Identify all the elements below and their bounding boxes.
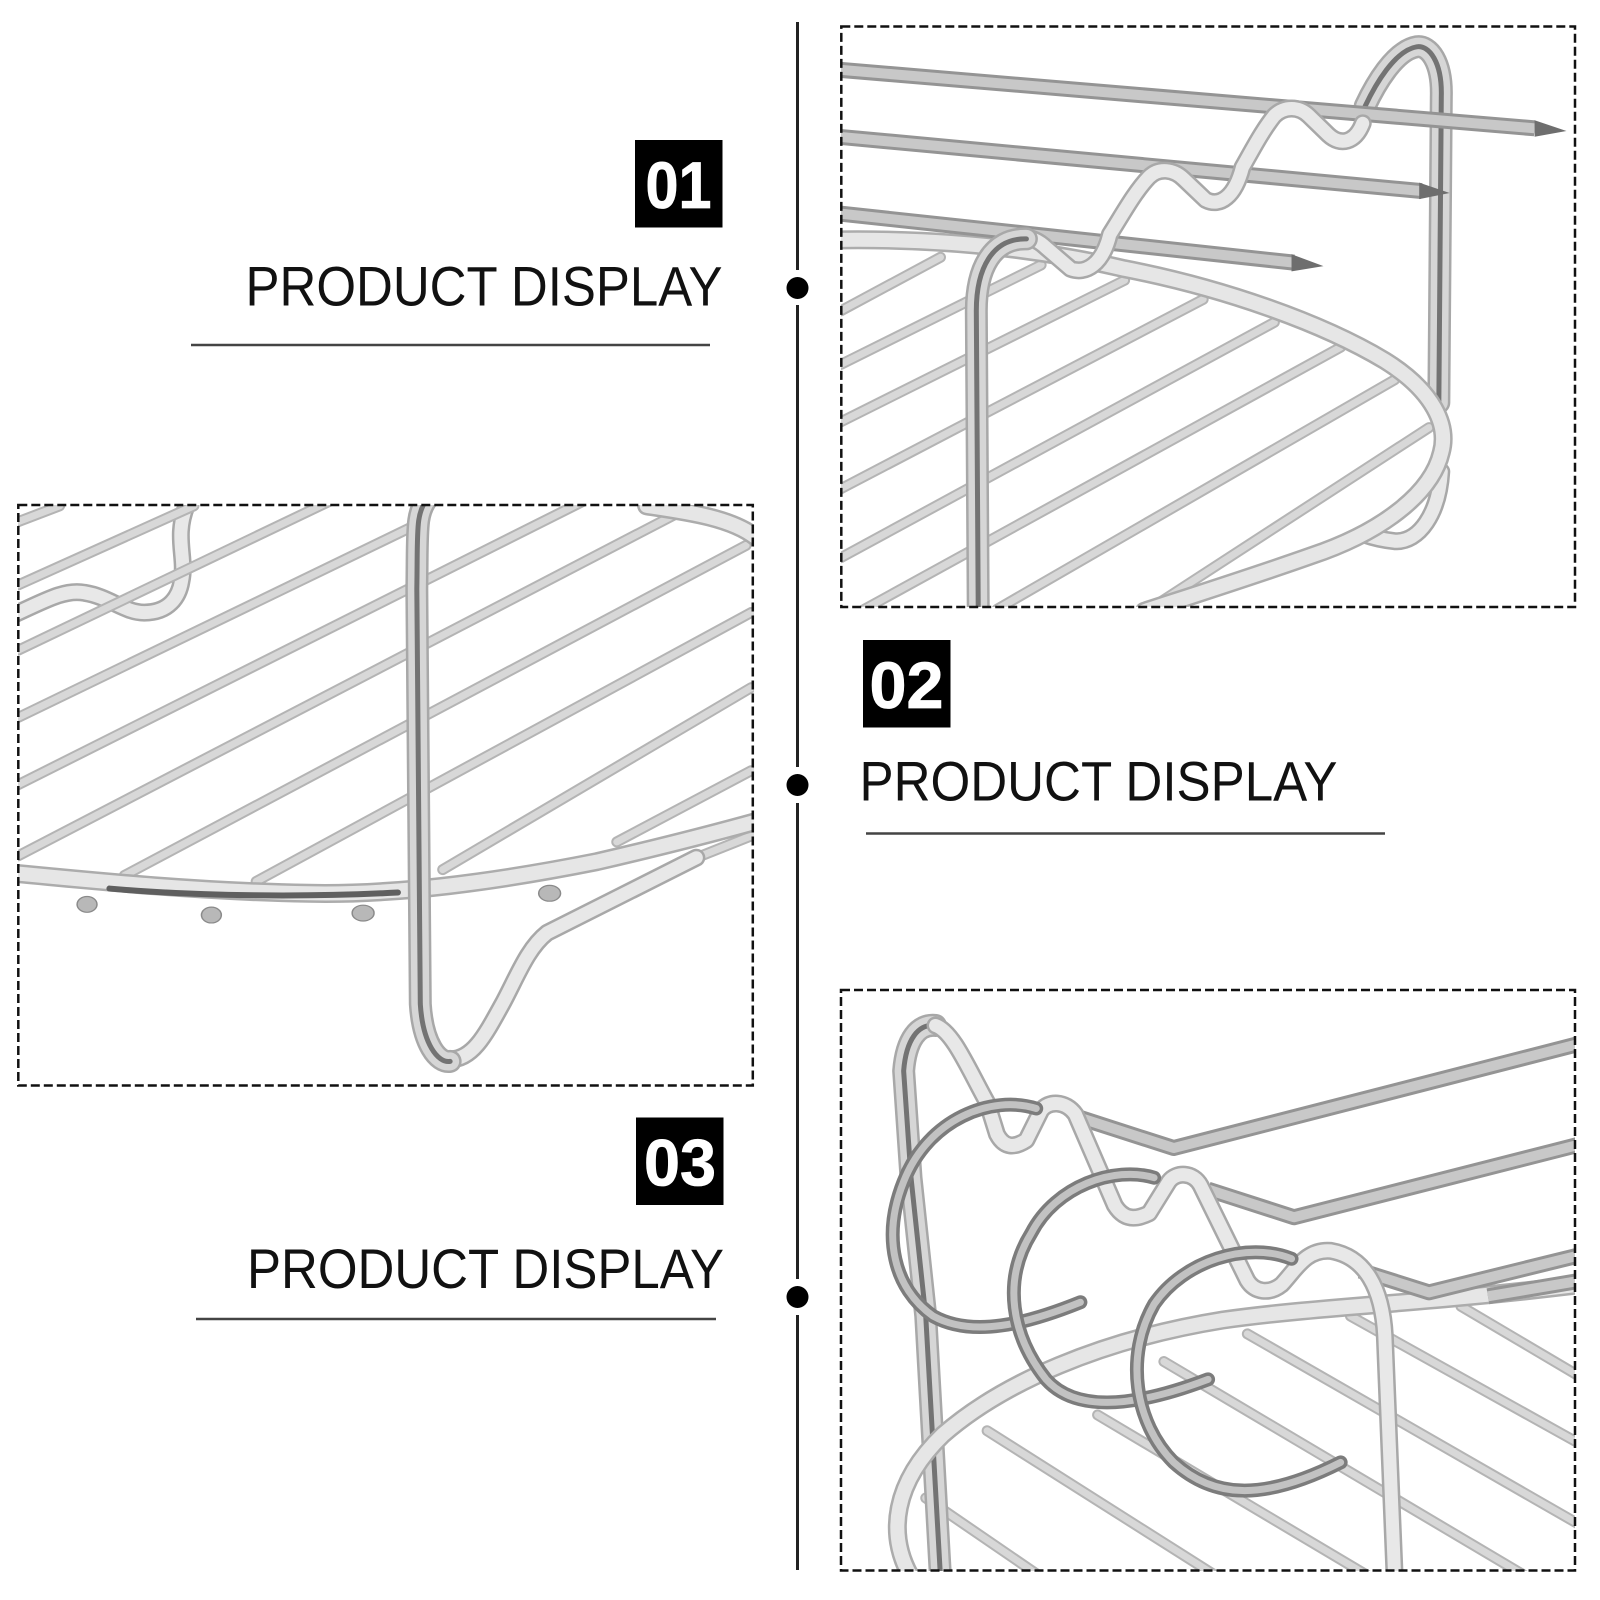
ring 1 [893, 1105, 1080, 1327]
panel: rack leg close-up photo [10, 498, 761, 1061]
rack grid wires [926, 1306, 1581, 1577]
number badge 01: 01 [646, 148, 712, 222]
rack rim [897, 1284, 1581, 1577]
skewer 2 [830, 136, 1450, 199]
front leg [976, 239, 1026, 617]
underline 02 [866, 832, 1385, 835]
number badge 03: 03 [644, 1126, 716, 1200]
panel 1 dashed frame [841, 26, 1575, 607]
foot wire [450, 832, 761, 1059]
number badge 02: 02 [870, 648, 944, 722]
zigzag holder wire [936, 1025, 1395, 1577]
ring 2 [1014, 1174, 1208, 1402]
rim pegs [77, 885, 561, 923]
ring 3 [1137, 1252, 1341, 1491]
upper hook wire [10, 506, 187, 617]
heading: product display 03: PRODUCT DISPLAY [247, 1237, 724, 1300]
panel: skewers photo [830, 47, 1566, 617]
back leg [904, 1025, 940, 1577]
underline 03 [196, 1318, 716, 1320]
heading: product display 01: PRODUCT DISPLAY [246, 255, 722, 318]
back leg [1365, 47, 1441, 541]
underline 01 [191, 344, 710, 346]
skewer 3 [830, 212, 1323, 271]
main leg [417, 498, 450, 1061]
heading: product display 02: PRODUCT DISPLAY [860, 750, 1338, 813]
zigzag holder wire [1017, 108, 1363, 270]
timeline axis with three dots [786, 22, 808, 1570]
skewer rods [1076, 1043, 1581, 1296]
panel 2 dashed frame [18, 505, 753, 1086]
rack rim [830, 240, 1443, 611]
panel 3 dashed frame [841, 990, 1575, 1570]
rack grid wires [841, 257, 1429, 609]
rack rim [10, 506, 761, 895]
panel: rings and hooks photo [893, 1025, 1581, 1577]
skewer 1 [830, 69, 1566, 137]
rack grid wires [18, 502, 751, 881]
